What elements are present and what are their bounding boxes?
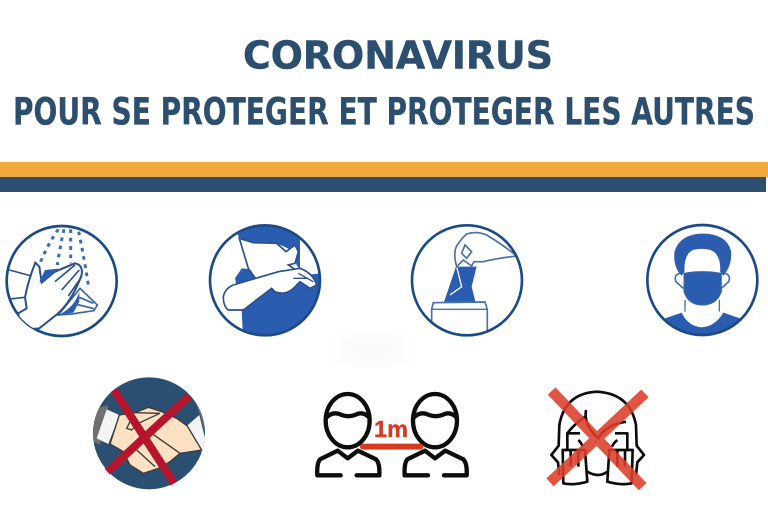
person right (405, 394, 467, 475)
header bars (0, 162, 768, 192)
distance bar (360, 444, 423, 450)
icon: no handshake (90, 377, 208, 489)
distance label: 1m (374, 416, 408, 442)
red cross (107, 390, 189, 483)
person left (317, 394, 379, 475)
icon: wearing a mask (647, 225, 757, 343)
icon: tissue in bin (412, 225, 522, 335)
faint background smudge (338, 336, 406, 364)
red cross (550, 391, 645, 487)
icon: washing hands (7, 226, 117, 336)
icon: sneezing into elbow (210, 223, 320, 343)
icon: keep 1m distance (317, 394, 467, 475)
icon: do not touch face (550, 391, 645, 487)
title: CORONAVIRUS (243, 34, 553, 78)
